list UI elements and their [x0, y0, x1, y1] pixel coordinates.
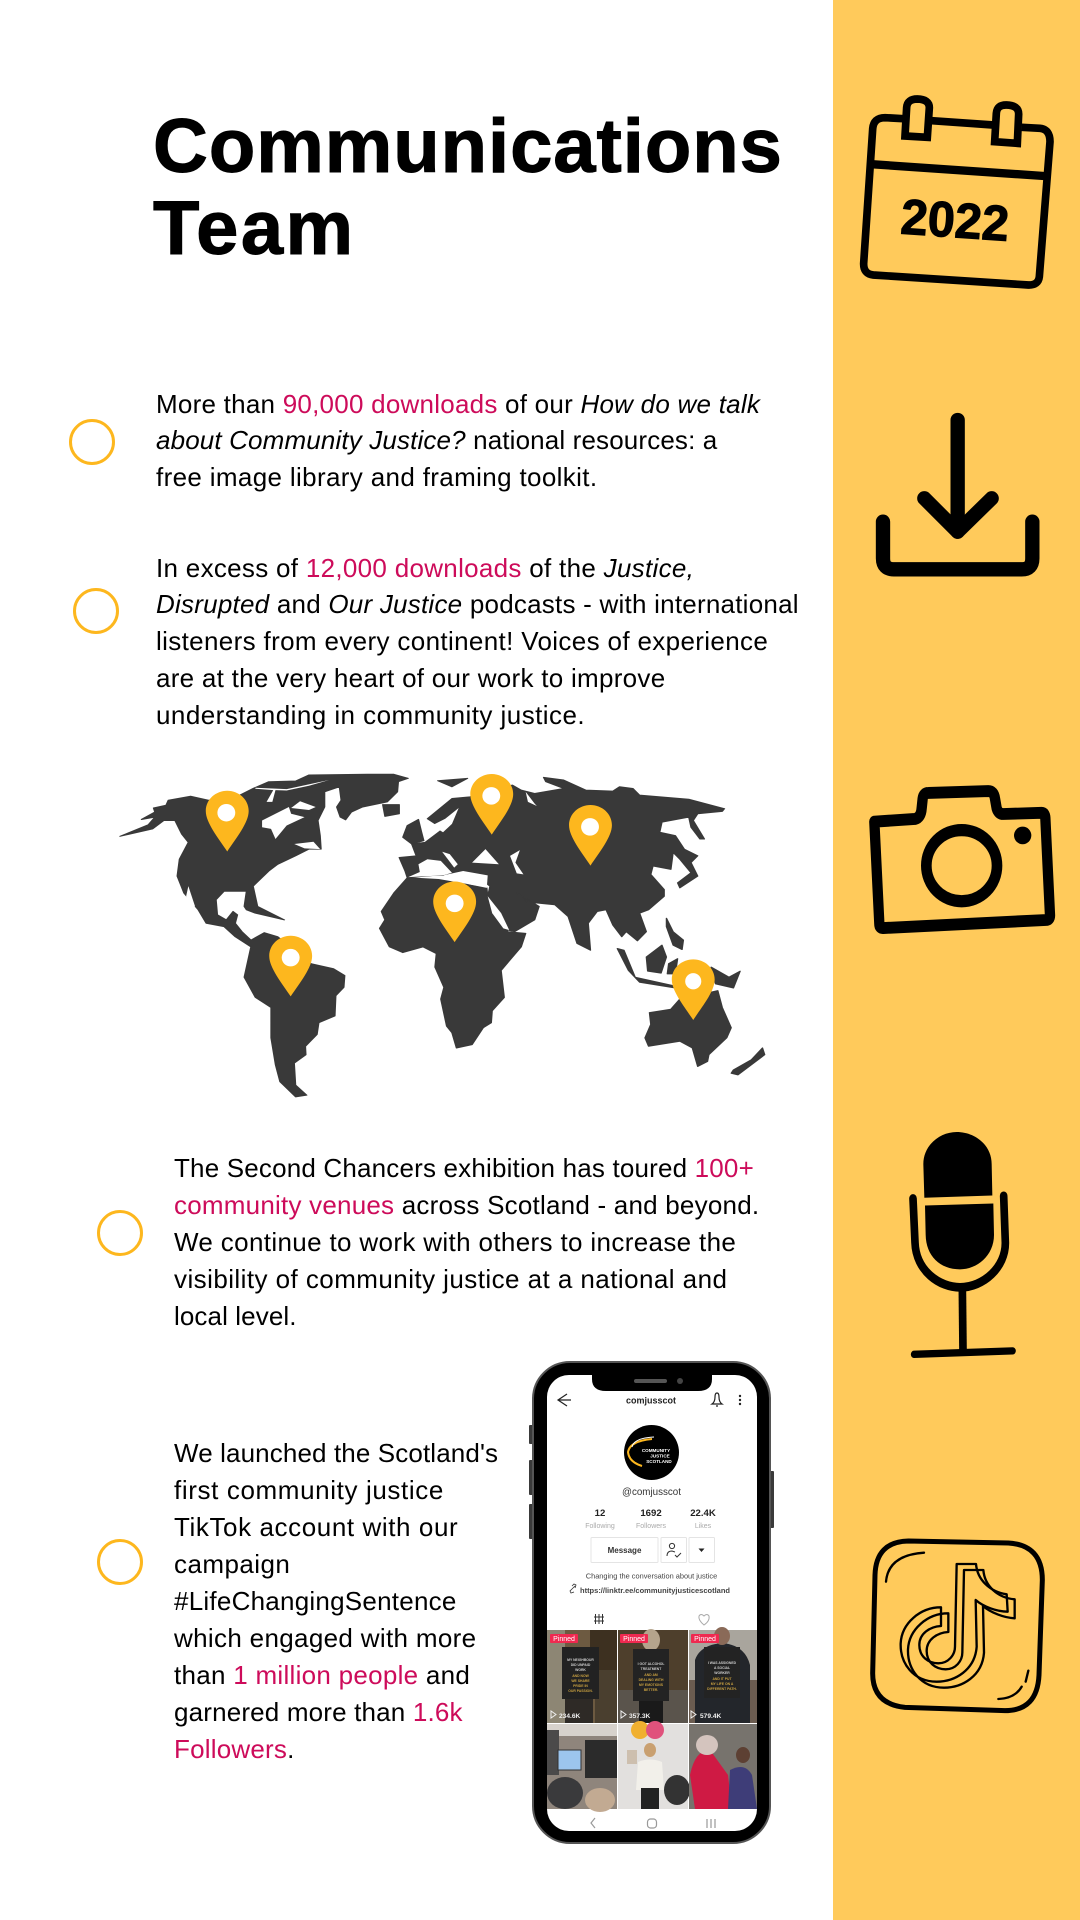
pinned badges: Pinned [623, 1636, 645, 1643]
video tile 2: BETTER. [644, 1688, 658, 1692]
profile stats: 1692 [640, 1508, 662, 1519]
text block: exhibition: visibility of community justice at a national and [174, 1264, 727, 1294]
video view counts: 357.3K [629, 1713, 651, 1720]
pinned badges: Pinned [553, 1636, 575, 1643]
title: Communications [153, 104, 783, 189]
avatar logo: SCOTLAND [646, 1459, 672, 1464]
profile stats [585, 1508, 716, 1530]
profile buttons: Message [608, 1546, 642, 1555]
text block: TikTok campaign: garnered more than 1.6k [174, 1697, 463, 1727]
profile stats: Following [585, 1523, 615, 1530]
pin: Asia [569, 805, 612, 866]
video tile 2: AND AM [644, 1673, 658, 1677]
phone side buttons [529, 1425, 774, 1539]
video tile 3: A SOCIAL [714, 1666, 730, 1670]
video tile 3: WORKER [714, 1671, 730, 1675]
text block: exhibition: We continue to work with others to increase the [174, 1227, 736, 1257]
bio and link: Changing the conversation about justice [586, 1572, 717, 1580]
video tile 3: DIFFERENT PATH. [707, 1687, 737, 1691]
icon: microphone [913, 1132, 1013, 1354]
text block: TikTok campaign: which engaged with more [174, 1623, 476, 1653]
bullet circle 2 [73, 588, 119, 634]
video tile 1 [547, 1630, 617, 1723]
text block: TikTok campaign: Followers. [174, 1734, 294, 1764]
year label: 2022 [899, 189, 1011, 252]
profile stats: 12 [595, 1508, 605, 1519]
pin: South America [269, 936, 312, 996]
app header [558, 1393, 741, 1406]
calendar header line [873, 164, 1044, 176]
video view counts [551, 1711, 722, 1720]
pin: Africa [433, 881, 476, 942]
text block: TikTok campaign [174, 1438, 498, 1764]
pinned badges: Pinned [694, 1636, 716, 1643]
video tile 2 [618, 1629, 688, 1723]
title [153, 104, 783, 271]
navigation bar [591, 1818, 715, 1828]
video tile 3: AND IT PUT [712, 1677, 732, 1681]
text block: exhibition [174, 1153, 759, 1331]
video tile 2: TREATMENT [641, 1667, 662, 1671]
text block: resource downloads: about Community Justice? national resources: a [156, 425, 717, 455]
phone screen [547, 1375, 757, 1831]
avatar logo: JUSTICE [650, 1454, 670, 1458]
text block: resource downloads: free image library and framing toolkit. [156, 462, 597, 492]
phone mockup with TikTok profile [529, 1361, 774, 1844]
text block: podcast downloads: listeners from every continent! Voices of experience [156, 626, 768, 656]
pin: Europe [470, 774, 513, 835]
bullet circle 3 [96, 1210, 142, 1256]
notch [592, 1375, 712, 1391]
icon: download [876, 412, 1040, 576]
video tile 3: I WAS ASSIGNED [708, 1661, 737, 1665]
calendar tabs [905, 99, 1019, 143]
tab icons [594, 1614, 709, 1625]
text block: exhibition: The Second Chancers exhibition has toured 100+ [174, 1153, 754, 1183]
text block: podcast downloads: are at the very heart of our work to improve [156, 663, 665, 693]
text block: exhibition: local level. [174, 1301, 297, 1331]
video tile 4 [547, 1724, 617, 1812]
pinned badges [550, 1634, 719, 1643]
icon: calendar 2022 [860, 95, 1054, 289]
phone body [533, 1362, 770, 1843]
text block: TikTok campaign: TikTok account with our [174, 1512, 458, 1542]
video tile 6 [689, 1724, 757, 1809]
yellow side panel [833, 0, 1080, 1920]
avatar logo [624, 1425, 679, 1480]
bullet circle 1 [68, 418, 114, 464]
text block: TikTok campaign: campaign [174, 1549, 290, 1579]
bio and link: https://linktr.ee/communityjusticescotland [580, 1586, 730, 1595]
video tile 1: WORK [575, 1668, 586, 1672]
title: Team [153, 186, 356, 271]
text block: resource downloads [156, 388, 761, 492]
video tile 1: DID UNPAID [571, 1663, 591, 1667]
video tile 3: MY LIFE ON A [711, 1682, 734, 1686]
profile buttons [591, 1538, 714, 1562]
video tile 1: OUR PASSION. [568, 1689, 593, 1693]
video tile 1: PRIDE IN [573, 1684, 588, 1688]
video view counts: 234.6K [559, 1713, 581, 1720]
pin: Australia [672, 959, 715, 1020]
video tile 1: AND NOW [572, 1674, 590, 1678]
text block: TikTok campaign: than 1 million people and [174, 1660, 470, 1690]
profile stats: Likes [695, 1523, 712, 1530]
app header: comjusscot [626, 1396, 676, 1406]
text block: exhibition: community venues across Scotland - and beyond. [174, 1190, 759, 1220]
avatar logo: COMMUNITY [642, 1448, 670, 1453]
handle: @comjusscot [622, 1487, 681, 1498]
video tile 2: MY EMOTIONS [639, 1683, 664, 1687]
text block: podcast downloads: understanding in community justice. [156, 700, 585, 730]
video tile 1: WE SHARE [571, 1679, 590, 1683]
video tile 1: MY NEIGHBOUR [567, 1658, 594, 1662]
text block: podcast downloads: Disrupted and Our Justice podcasts - with international [156, 589, 799, 619]
world map with location pins [119, 774, 766, 1098]
video tile 2: I GOT ALCOHOL [638, 1662, 664, 1666]
profile stats: Followers [636, 1523, 666, 1530]
video tile 3 [689, 1627, 757, 1723]
profile stats: 22.4K [690, 1508, 716, 1519]
text block: TikTok campaign: first community justice [174, 1475, 444, 1505]
text block: podcast downloads: In excess of 12,000 downloads of the Justice, [156, 552, 694, 582]
bullet circle 4 [96, 1539, 142, 1585]
video view counts: 579.4K [700, 1713, 722, 1720]
video tile 2: DEALING WITH [639, 1678, 664, 1682]
icon: camera [874, 791, 1050, 928]
text block: TikTok campaign: #LifeChangingSentence [174, 1586, 457, 1616]
pin: North America [206, 791, 249, 851]
text block: TikTok campaign: We launched the Scotland's [174, 1438, 498, 1468]
text block: podcast downloads [156, 552, 799, 730]
icons: camera and microphone [869, 785, 1056, 1358]
icon: TikTok logo [870, 1538, 1045, 1714]
text block: resource downloads: More than 90,000 downloads of our How do we talk [156, 388, 760, 418]
video tile 5 [618, 1721, 690, 1809]
calendar outline [864, 118, 1050, 285]
bio and link [570, 1572, 730, 1595]
